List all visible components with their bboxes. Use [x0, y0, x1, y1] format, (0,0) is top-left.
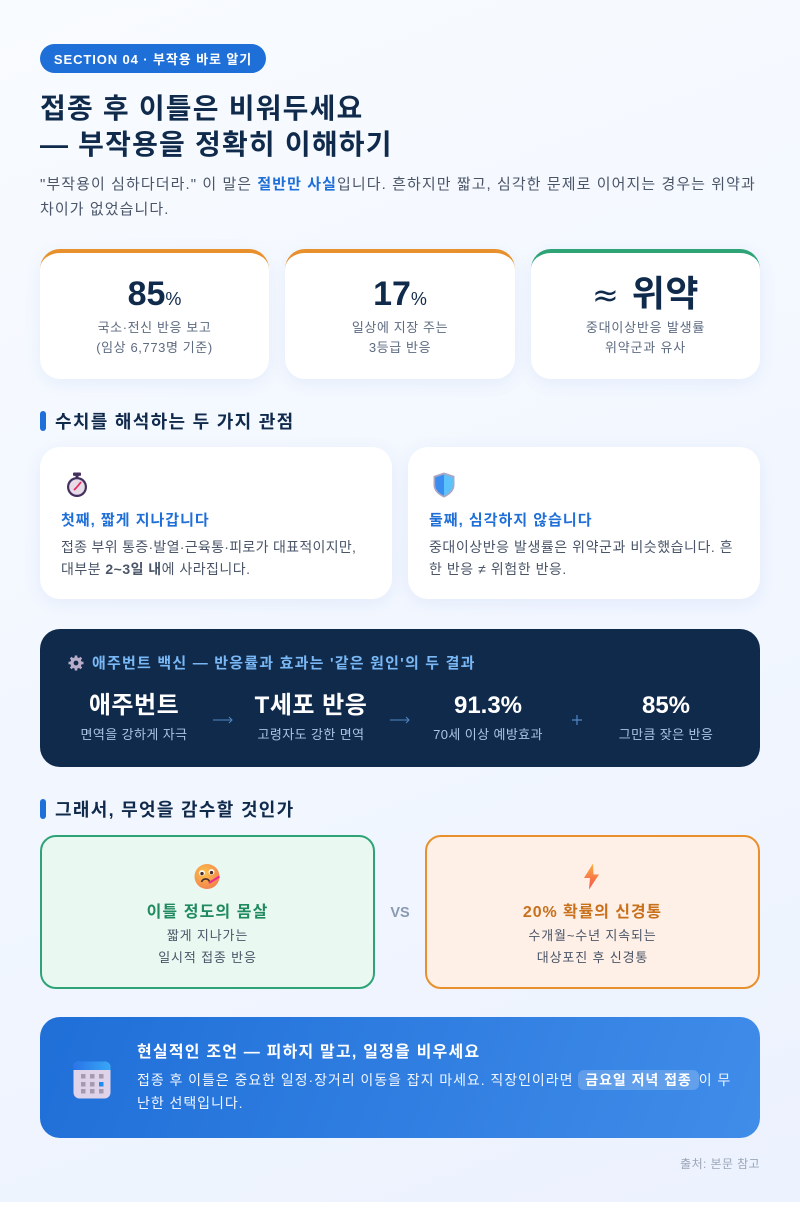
stat value: ≈ 위약 [592, 273, 699, 314]
section heading: two perspectives: 수치를 해석하는 두 가지 관점 [55, 412, 295, 432]
flow step: 91.3%: 91.3% [454, 692, 522, 719]
card heading: 첫째, 짧게 지나갑니다 [61, 512, 210, 529]
title: 접종 후 이틀은 비워두세요 [40, 93, 364, 124]
stat caption: (임상 6,773명 기준) [96, 340, 213, 355]
stat card: 85% [40, 249, 269, 379]
icon: shield [434, 472, 454, 498]
flow step: T cell: 고령자도 강한 면역 [258, 727, 364, 742]
stat caption [586, 320, 705, 355]
stat card: 17% [285, 249, 515, 379]
icon: sick face [194, 864, 220, 889]
icon: gear [68, 656, 84, 670]
card body [61, 539, 356, 577]
stat caption: 위약군과 유사 [605, 340, 686, 355]
source note: 출처: 본문 참고 [680, 1157, 760, 1171]
stat caption: 중대이상반응 발생률 [586, 320, 705, 335]
card body [528, 928, 657, 965]
title: — 부작용을 정확히 이해하기 [40, 129, 393, 160]
flow step: T cell [254, 692, 367, 742]
card body: 한 반응 ≠ 위험한 반응. [429, 561, 567, 577]
card heading: 둘째, 심각하지 않습니다 [429, 512, 593, 529]
title [40, 93, 393, 160]
card body: 대상포진 후 신경통 [537, 950, 648, 965]
stat value: 85% [128, 275, 181, 313]
stat card: placebo [531, 249, 760, 379]
advice body [137, 1070, 731, 1111]
panel: shingles pain [425, 835, 760, 989]
section badge: SECTION 04 · 부작용 바로 알기 [54, 52, 252, 67]
vs label: VS [390, 905, 410, 921]
card body: 일시적 접종 반응 [158, 950, 257, 965]
advice body: 난한 선택입니다. [137, 1095, 244, 1111]
panel: adjuvant vaccine [40, 629, 760, 767]
stat caption: 일상에 지장 주는 [352, 320, 448, 335]
icon: stopwatch [67, 472, 87, 497]
card body [429, 539, 733, 577]
flow step: T cell: T세포 반응 [255, 692, 367, 719]
stat caption [96, 320, 213, 355]
card body: 수개월~수년 지속되는 [528, 928, 657, 943]
section badge [40, 44, 266, 73]
panel: first perspective [40, 447, 392, 599]
stat caption: 3등급 반응 [369, 340, 431, 355]
advice body: 접종 후 이틀은 중요한 일정·장거리 이동을 잡지 마세요. 직장인이라면 금요일 저녁 접종 이 무 [137, 1072, 731, 1088]
card body: 접종 부위 통증·발열·근육통·피로가 대표적이지만, [61, 539, 356, 555]
card body: 대부분 2~3일 내에 사라집니다. [61, 561, 250, 577]
card heading: 이틀 정도의 몸살 [147, 904, 268, 921]
plus sign [572, 715, 582, 725]
card heading: 20% 확률의 신경통 [523, 904, 662, 921]
icon: lightning [584, 864, 599, 890]
panel: practical advice [40, 1017, 760, 1138]
flow step: adjuvant: 면역을 강하게 자극 [81, 727, 187, 742]
intro text [40, 176, 756, 218]
card body: 중대이상반응 발생률은 위약군과 비슷했습니다. 흔 [429, 539, 733, 555]
flow step: 91.3%: 70세 이상 예방효과 [433, 727, 543, 742]
intro text: 차이가 없었습니다. [40, 201, 169, 218]
panel: two-day discomfort [40, 835, 375, 989]
stat caption [352, 320, 448, 355]
intro text: "부작용이 심하다더라." 이 말은 절반만 사실입니다. 흔하지만 짧고, 심각한 문제로 이어지는 경우는 위약과 [40, 176, 756, 193]
advice heading: 현실적인 조언 — 피하지 말고, 일정을 비우세요 [137, 1044, 480, 1061]
flow step: 85%: 85% [642, 692, 690, 719]
card body [158, 928, 257, 965]
flow step: 91.3% [433, 692, 543, 742]
stat caption: 국소·전신 반응 보고 [98, 320, 211, 335]
panel heading: 애주번트 백신 — 반응률과 효과는 '같은 원인'의 두 결과 [92, 655, 476, 672]
arrow [390, 716, 410, 724]
flow step: 85%: 그만큼 잦은 반응 [619, 727, 713, 742]
arrow [213, 716, 233, 724]
stat value: 17% [373, 275, 427, 313]
section heading: trade-off: 그래서, 무엇을 감수할 것인가 [55, 800, 295, 820]
flow step: 85% [619, 692, 713, 742]
flow step: adjuvant: 애주번트 [89, 692, 179, 719]
panel: second perspective [408, 447, 760, 599]
flow step: adjuvant [81, 692, 187, 742]
icon: calendar [74, 1062, 110, 1098]
card body: 짧게 지나가는 [167, 928, 248, 943]
